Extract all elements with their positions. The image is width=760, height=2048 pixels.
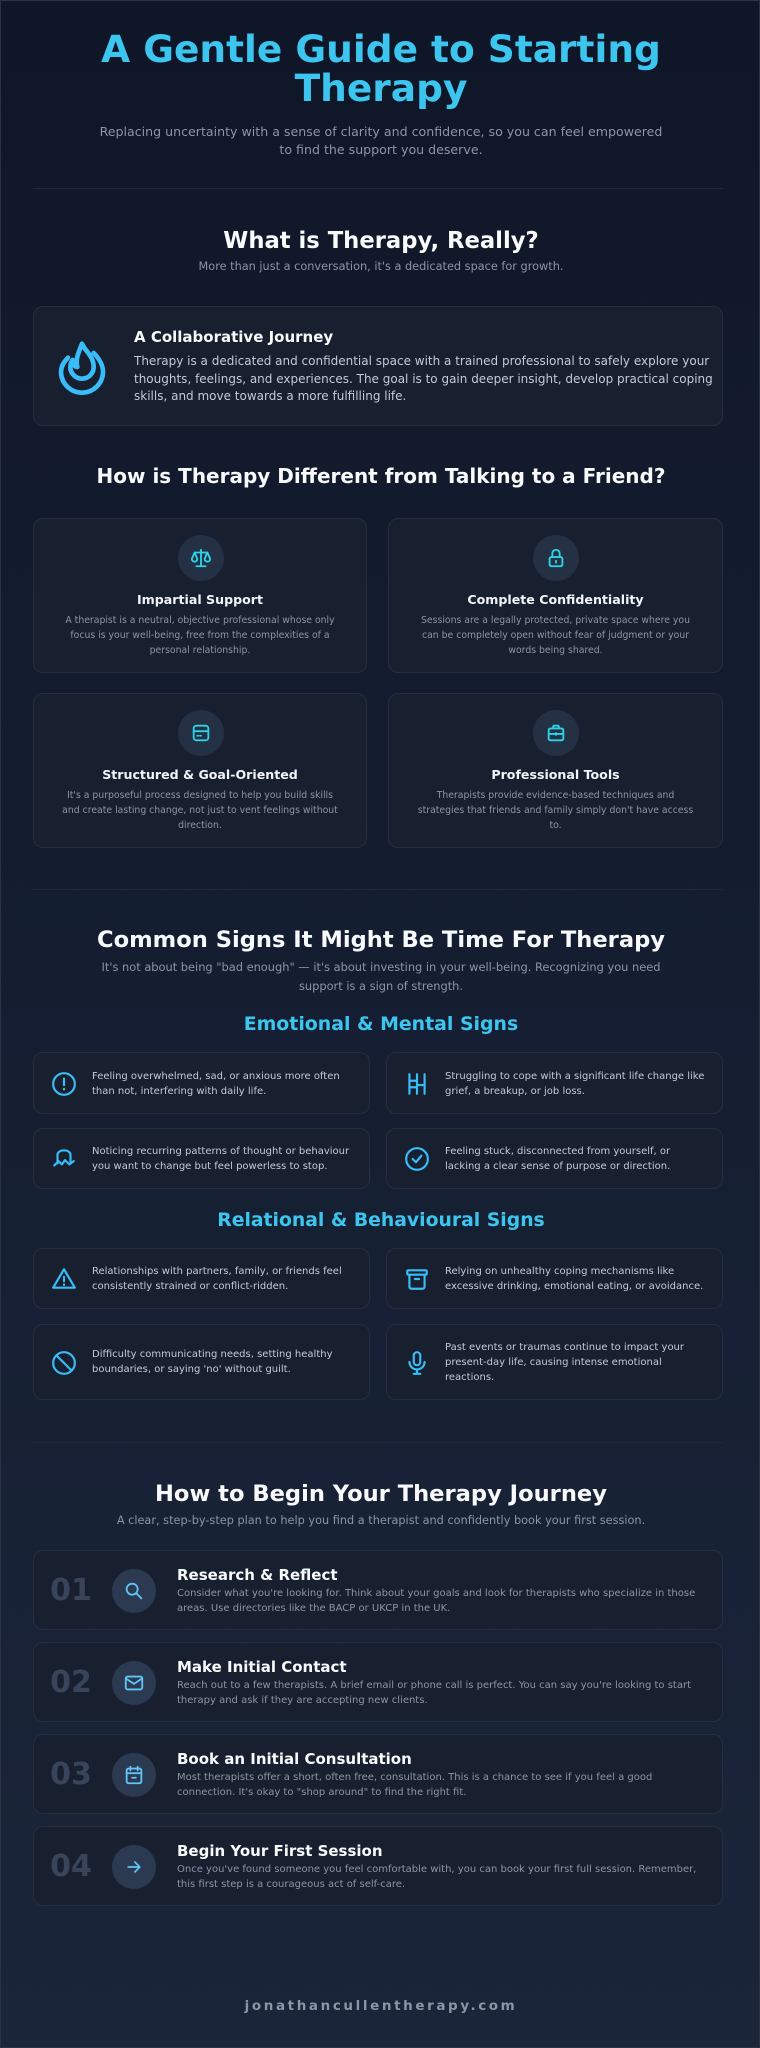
icon: search <box>112 1569 156 1613</box>
subtitle: to find the support you deserve. <box>279 142 483 156</box>
number: 02 <box>50 1665 92 1700</box>
step text: Once you've found someone you feel comfortable with, you can book your first full session. Remember, <box>177 1864 696 1875</box>
text: reactions. <box>445 1372 494 1383</box>
icon: mail <box>112 1661 156 1705</box>
text: tools title: Professional Tools <box>491 767 620 782</box>
text: collaborative journey body: skills, and move towards a more fulfilling life. <box>134 389 406 403</box>
text: confidentiality body: words being shared. <box>508 645 603 656</box>
step text: Reach out to a few therapists. A brief email or phone call is perfect. You can say you're looking to start <box>177 1680 691 1691</box>
title: Therapy <box>295 66 467 110</box>
text: than not, interfering with daily life. <box>92 1086 266 1097</box>
subheading: common signs: support is a sign of strength. <box>299 979 463 993</box>
text: Past events or traumas continue to impact your <box>445 1342 684 1353</box>
text: impartial body: personal relationship. <box>150 645 250 656</box>
sign: coping <box>386 1248 723 1309</box>
text: impartial body: A therapist is a neutral, objective professional whose only <box>65 615 335 626</box>
text: confidentiality title: Complete Confidentiality <box>467 592 644 607</box>
step text: Consider what you're looking for. Think about your goals and look for therapists who specialize in those <box>177 1588 695 1599</box>
heading: how to begin: How to Begin Your Therapy Journey <box>155 1481 607 1507</box>
step 2 <box>33 1642 723 1722</box>
text: structured body: direction. <box>178 820 222 831</box>
sign: communicating <box>33 1324 370 1400</box>
text <box>445 1071 704 1097</box>
footer: jonathancullentherapy.com <box>245 1998 517 2014</box>
step title: Research & Reflect <box>177 1566 338 1584</box>
step title: Begin Your First Session <box>177 1842 383 1860</box>
sign: life change <box>386 1052 723 1114</box>
step title: Book an Initial Consultation <box>177 1750 412 1768</box>
icon: scales <box>178 535 224 581</box>
icon: archive box <box>406 1269 428 1290</box>
subtitle <box>100 124 662 156</box>
text: boundaries, or saying 'no' without guilt. <box>92 1364 291 1375</box>
step text: this first step is a courageous act of self-care. <box>177 1879 405 1890</box>
sign: past events <box>386 1324 723 1400</box>
step 1 <box>33 1550 723 1630</box>
text: Noticing recurring patterns of thought or behaviour <box>92 1146 349 1157</box>
step text <box>177 1772 652 1798</box>
text: collaborative journey body <box>134 354 713 403</box>
text: confidentiality body <box>421 615 690 656</box>
step text: areas. Use directories like the BACP or UKCP in the UK. <box>177 1603 450 1614</box>
text <box>92 1349 332 1375</box>
text: collaborative journey body: Therapy is a dedicated and confidential space with a trained professional to safely explore your <box>134 354 709 368</box>
text <box>445 1342 684 1383</box>
text: structured body: and create lasting change, not just to vent feelings without <box>62 805 338 816</box>
subheading: common signs: It's not about being "bad enough" — it's about investing in your well-being. Recognizing you need <box>102 960 660 974</box>
text: Struggling to cope with a significant life change like <box>445 1071 704 1082</box>
text: structured title: Structured & Goal-Oriented <box>102 767 298 782</box>
step text: Most therapists offer a short, often free, consultation. This is a chance to see if you feel a good <box>177 1772 652 1783</box>
panel: impartial support <box>33 518 367 673</box>
number: 01 <box>50 1573 92 1608</box>
step text <box>177 1588 695 1614</box>
text <box>92 1071 340 1097</box>
icon: microphone <box>408 1351 426 1375</box>
text: tools body <box>418 790 693 831</box>
icon: alert circle <box>52 1072 76 1096</box>
title: A Gentle Guide to Starting <box>101 27 661 71</box>
subheading: what is therapy: More than just a conversation, it's a dedicated space for growth. <box>199 260 563 273</box>
subheading: how to begin: A clear, step-by-step plan to help you find a therapist and confidently book your first session. <box>117 1514 645 1527</box>
text: collaborative journey body: thoughts, feelings, and experiences. The goal is to gain deeper insight, develop practical coping <box>134 372 713 386</box>
icon: card <box>178 710 224 756</box>
panel: professional tools <box>388 693 723 848</box>
text: structured body <box>62 790 338 831</box>
step 3 <box>33 1734 723 1814</box>
text: collaborative journey title: A Collaborative Journey <box>134 328 333 346</box>
text: impartial body <box>65 615 335 656</box>
icon: check circle <box>405 1147 429 1171</box>
text: present-day life, causing intense emotional <box>445 1357 662 1368</box>
icon: patterns <box>53 1149 75 1167</box>
panel: collaborative journey <box>33 306 723 426</box>
text: Relying on unhealthy coping mechanisms like <box>445 1266 674 1277</box>
text: impartial body: focus is your well-being, free from the complexities of a <box>70 630 330 641</box>
step 4 <box>33 1826 723 1906</box>
text: tools body: to. <box>549 820 562 831</box>
text: confidentiality body: can be completely open without fear of judgment or your <box>422 630 689 641</box>
text: Feeling overwhelmed, sad, or anxious more often <box>92 1071 340 1082</box>
text <box>92 1266 342 1292</box>
text: excessive drinking, emotional eating, or avoidance. <box>445 1281 703 1292</box>
sign: overwhelmed <box>33 1052 370 1114</box>
heading: what is therapy: What is Therapy, Really? <box>223 228 539 254</box>
text <box>92 1146 350 1172</box>
panel: structured <box>33 693 367 848</box>
text <box>445 1146 670 1172</box>
text: impartial title: Impartial Support <box>137 592 263 607</box>
icon: flame <box>58 341 106 395</box>
text: confidentiality body: Sessions are a legally protected, private space where you <box>421 615 690 626</box>
text: tools body: strategies that friends and family simply don't have access <box>418 805 693 816</box>
step text <box>177 1864 696 1890</box>
icon: arrow <box>112 1845 156 1889</box>
text: you want to change but feel powerless to stop. <box>92 1161 328 1172</box>
icon: ladder <box>408 1073 426 1095</box>
icon: warning triangle <box>52 1268 76 1289</box>
icon: briefcase <box>533 710 579 756</box>
step text: therapy and ask if they are accepting new clients. <box>177 1695 428 1706</box>
heading: common signs: Common Signs It Might Be Time For Therapy <box>97 927 665 953</box>
text: Difficulty communicating needs, setting healthy <box>92 1349 332 1360</box>
icon: ban <box>52 1351 76 1375</box>
step text <box>177 1680 691 1706</box>
icon: lock <box>533 535 579 581</box>
subtitle: Replacing uncertainty with a sense of clarity and confidence, so you can feel empowered <box>100 124 662 139</box>
heading: different from friend: How is Therapy Different from Talking to a Friend? <box>97 464 665 488</box>
text: tools body: Therapists provide evidence-based techniques and <box>437 790 674 801</box>
text <box>445 1266 703 1292</box>
sign: relationships <box>33 1248 370 1309</box>
number: 04 <box>50 1849 92 1884</box>
text: consistently strained or conflict-ridden. <box>92 1281 288 1292</box>
subheading: common signs <box>102 960 660 993</box>
text: lacking a clear sense of purpose or direction. <box>445 1161 670 1172</box>
heading: emotional signs: Emotional & Mental Signs <box>244 1013 518 1035</box>
sign: patterns <box>33 1128 370 1189</box>
number: 03 <box>50 1757 92 1792</box>
title <box>101 27 661 110</box>
step title: Make Initial Contact <box>177 1658 347 1676</box>
panel: confidentiality <box>388 518 723 673</box>
text: Feeling stuck, disconnected from yourself, or <box>445 1146 670 1157</box>
text: grief, a breakup, or job loss. <box>445 1086 585 1097</box>
icon: calendar <box>112 1753 156 1797</box>
sign: stuck <box>386 1128 723 1189</box>
step text: connection. It's okay to "shop around" to find the right fit. <box>177 1787 466 1798</box>
text: structured body: It's a purposeful process designed to help you build skills <box>67 790 333 801</box>
text: Relationships with partners, family, or friends feel <box>92 1266 342 1277</box>
heading: relational signs: Relational & Behavioural Signs <box>217 1210 545 1231</box>
